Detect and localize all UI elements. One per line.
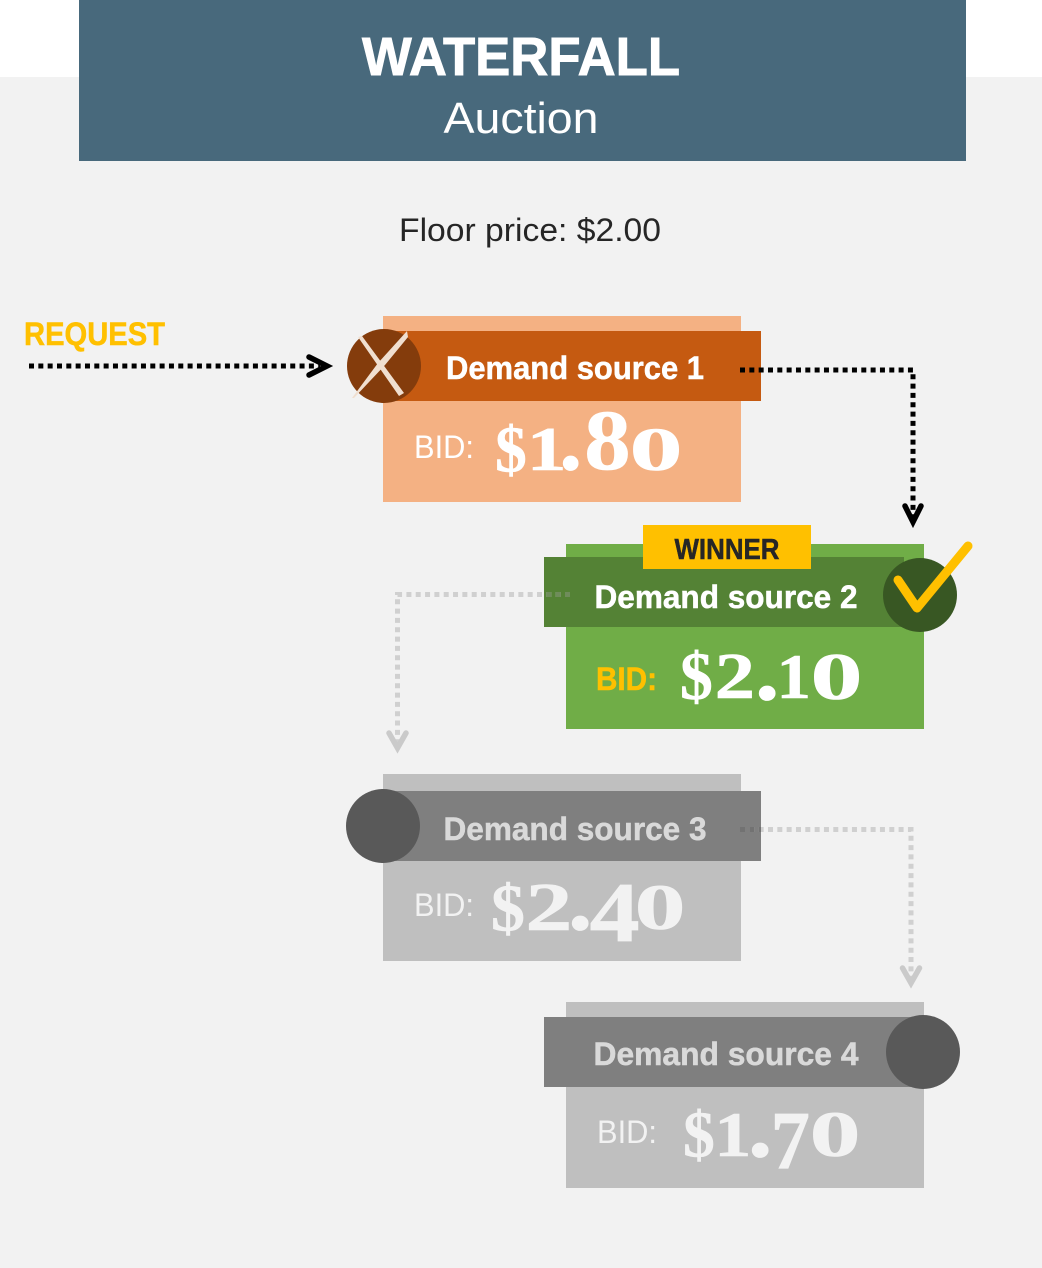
bid value: .: [568, 851, 592, 949]
bid value: 0: [630, 416, 683, 484]
panel: demand source 4: BID:: [597, 1114, 657, 1150]
panel: demand source 1: [347, 316, 761, 502]
icon: rejected cross: [347, 329, 421, 403]
arrow: source 3 to source 4 (inactive): [740, 830, 920, 983]
icon: inactive circle: [886, 1015, 960, 1089]
panel: demand source 2: Demand source 2: [594, 579, 858, 615]
request label: REQUEST: [24, 316, 165, 352]
bid value: 2: [525, 869, 572, 945]
arrow: source 1 to source 2: [740, 370, 921, 522]
bid value: 2: [715, 640, 755, 712]
bid value: [495, 389, 683, 489]
bid value: $: [680, 639, 713, 714]
winner tag: WINNER: [674, 534, 780, 566]
bid value: .: [755, 621, 779, 719]
bid value: [683, 1078, 860, 1186]
panel: demand source 1: BID:: [414, 429, 474, 465]
title banner: Auction: [444, 94, 598, 143]
panel: demand source 4: Demand source 4: [594, 1036, 859, 1072]
icon: inactive circle: [346, 789, 420, 863]
panel: demand source 2: BID:: [596, 661, 657, 697]
bid value: 0: [635, 873, 685, 944]
bid value: $: [683, 1097, 715, 1171]
panel: demand source 1: Demand source 1: [446, 350, 704, 386]
bid value: $: [495, 412, 527, 486]
title banner: [79, 0, 966, 161]
bid value: [680, 621, 862, 719]
bid value: 1: [714, 1099, 751, 1170]
bid value: 8: [584, 394, 631, 488]
bid value: 1: [776, 642, 811, 712]
bid value: 1: [527, 415, 567, 484]
winner tag: [643, 525, 811, 569]
bid value: [491, 851, 685, 960]
panel: demand source 3: [346, 774, 761, 961]
bid value: 0: [810, 639, 862, 714]
arrow: request to source 1: [29, 357, 327, 375]
arrow: source 2 to source 3 (inactive): [389, 594, 570, 748]
floor price: Floor price: $2.00: [399, 212, 661, 248]
panel: demand source 3: BID:: [414, 887, 474, 923]
bid value: 4: [590, 867, 640, 960]
bid value: 7: [771, 1095, 810, 1186]
bid value: .: [559, 389, 582, 489]
icon: winner check: [883, 546, 968, 632]
bid value: .: [748, 1078, 772, 1176]
panel: demand source 3: Demand source 3: [444, 811, 706, 847]
panel: demand source 2: [544, 525, 968, 729]
bid value: 0: [810, 1100, 860, 1171]
panel: demand source 4: [544, 1002, 960, 1188]
bid value: $: [491, 871, 525, 945]
title banner: WATERFALL: [362, 27, 680, 87]
